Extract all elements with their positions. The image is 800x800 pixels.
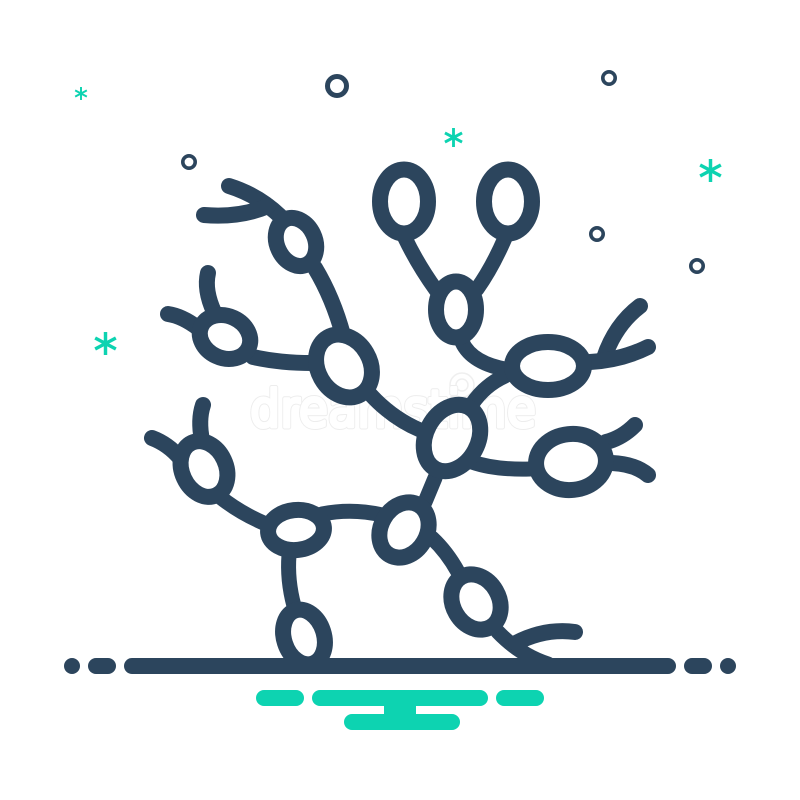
decorative asterisks xyxy=(75,87,721,355)
watermark: dreamstime xyxy=(250,380,536,440)
ground line xyxy=(64,658,736,674)
watermark: dreamstime xyxy=(250,380,536,440)
tree illustration xyxy=(152,170,648,670)
cell nodes xyxy=(172,170,609,670)
decorative rings xyxy=(183,72,703,272)
branches xyxy=(152,186,648,664)
teal base bars xyxy=(256,690,544,730)
